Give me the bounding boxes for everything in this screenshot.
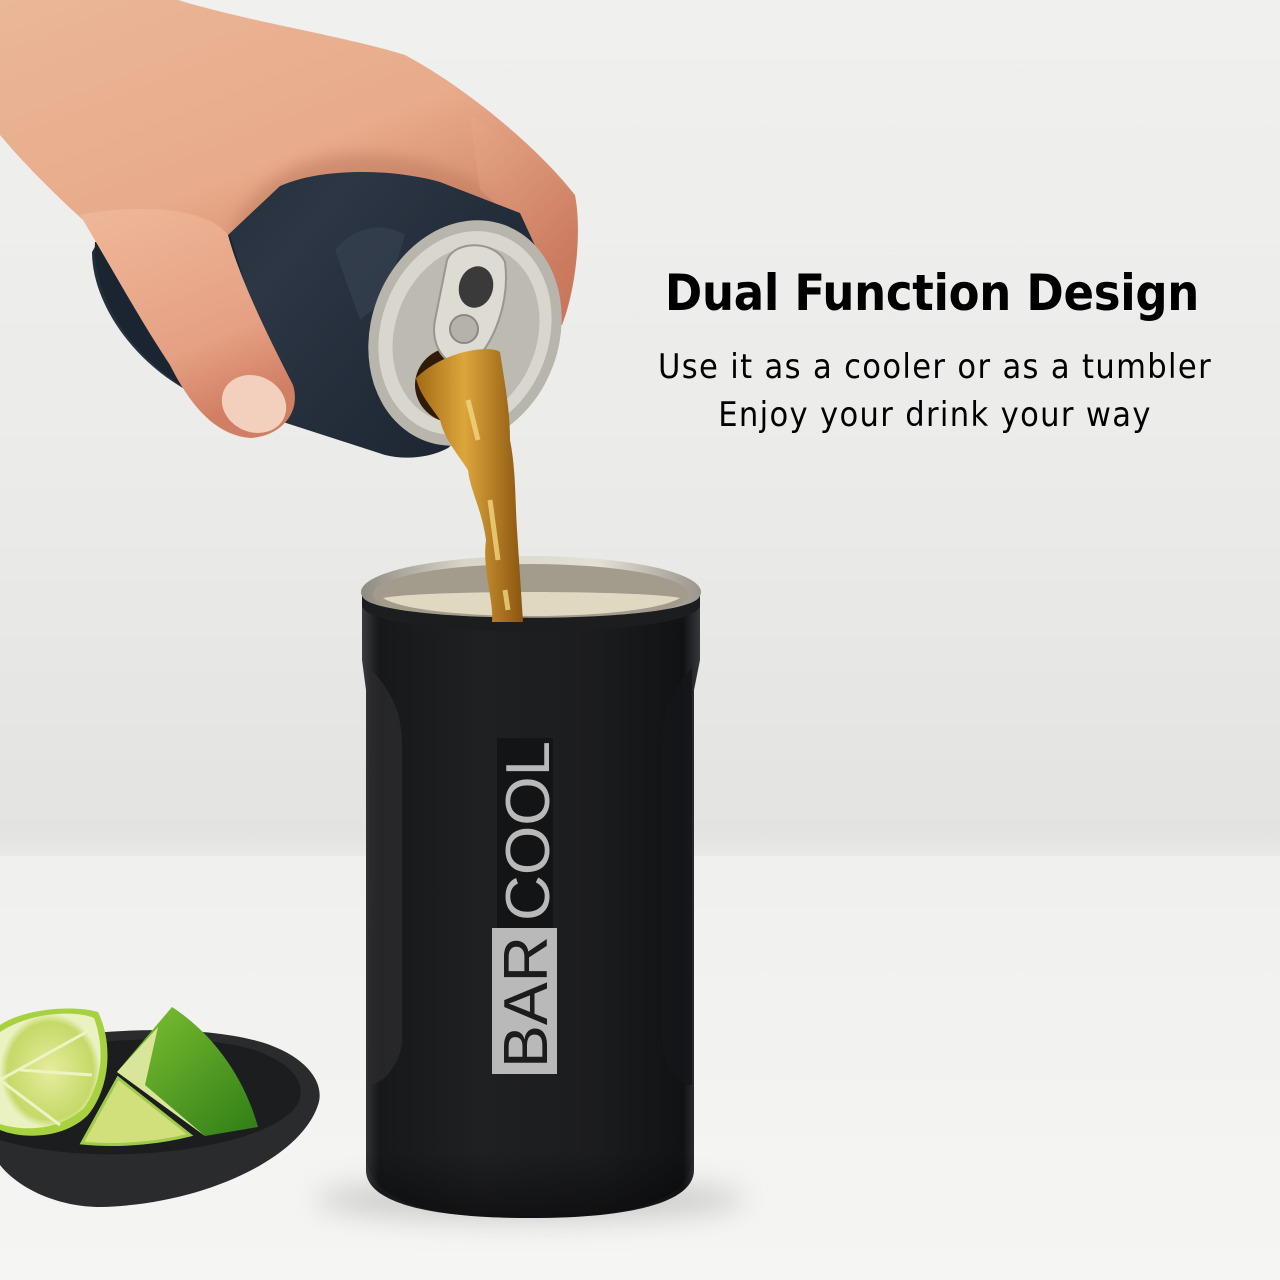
lime slice left xyxy=(0,1008,107,1136)
heading: Dual Function Design xyxy=(665,264,1199,322)
hand thumb xyxy=(80,209,296,443)
can body xyxy=(92,172,560,458)
pouring drink xyxy=(416,349,523,622)
black bowl with limes xyxy=(0,1007,320,1207)
lime wedge right xyxy=(117,1007,258,1136)
tumbler rim and inside xyxy=(361,556,701,632)
subheading text: Use it as a cooler or as a tumbler xyxy=(658,347,1212,387)
tumbler shadow xyxy=(315,1180,745,1220)
hand back part xyxy=(0,0,578,325)
BARCOOL logo on tumbler: BAR xyxy=(492,936,561,1068)
can top with pull tab xyxy=(337,193,593,473)
subheading text xyxy=(658,347,1212,435)
tumbler body xyxy=(362,576,700,1218)
lime wedge center xyxy=(82,1078,190,1144)
BARCOOL logo on tumbler: COOL xyxy=(494,741,563,921)
subheading text: Enjoy your drink your way xyxy=(718,395,1152,435)
table surface xyxy=(0,856,1280,1280)
background wall xyxy=(0,0,1280,860)
BARCOOL logo on tumbler xyxy=(492,738,563,1074)
